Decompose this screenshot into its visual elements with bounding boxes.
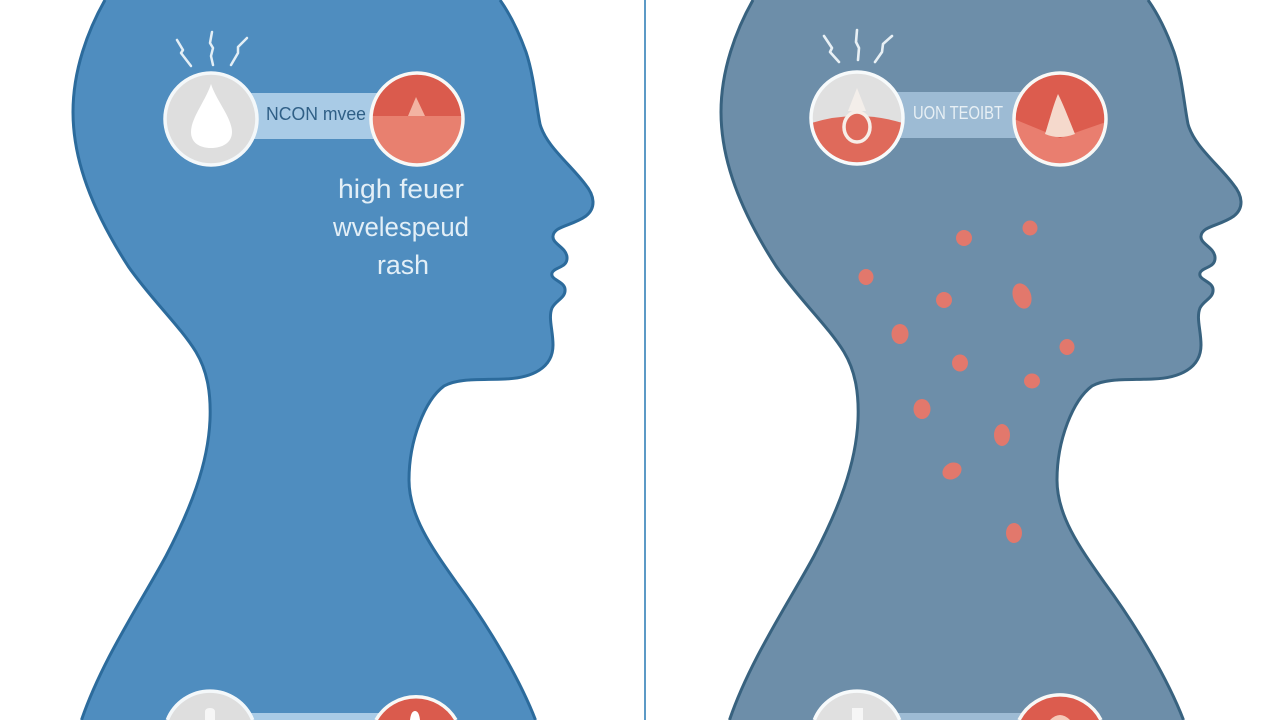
icon: red circle with peak: [371, 73, 463, 165]
panel: left head profile: [73, 0, 593, 720]
icon: red circle bottom right: [1019, 695, 1101, 720]
text block: symptoms: wvelespeud: [332, 212, 469, 242]
connector bar: right bottom: [895, 713, 1025, 720]
icon: half red circle with droplet: [811, 72, 903, 164]
divider line: [644, 0, 646, 720]
icon: heat lines left: [177, 32, 247, 66]
label: connector text: UON TEOIBT: [913, 103, 1003, 123]
connector bar: right top: [895, 92, 1025, 138]
head silhouette: left: [73, 0, 593, 720]
panel: right head profile: [721, 0, 1241, 720]
icon: red circle with cone: [1014, 73, 1106, 167]
connector bar: left top: [250, 93, 380, 139]
text block: symptoms: [332, 174, 469, 280]
connector bar: left bottom: [250, 713, 380, 720]
icon: red circle bottom left: [376, 697, 456, 720]
icon: heat lines right: [824, 30, 892, 62]
head silhouette: right: [721, 0, 1241, 720]
rash spots: [858, 220, 1074, 543]
text block: symptoms: rash: [377, 250, 429, 280]
icon: grey circle with droplet: [165, 73, 257, 165]
icon: grey circle bottom left: [167, 691, 253, 720]
icon: grey circle bottom right: [814, 691, 900, 720]
label: connector text: NCON mvee: [266, 104, 366, 124]
text block: symptoms: high feuer: [338, 174, 464, 204]
